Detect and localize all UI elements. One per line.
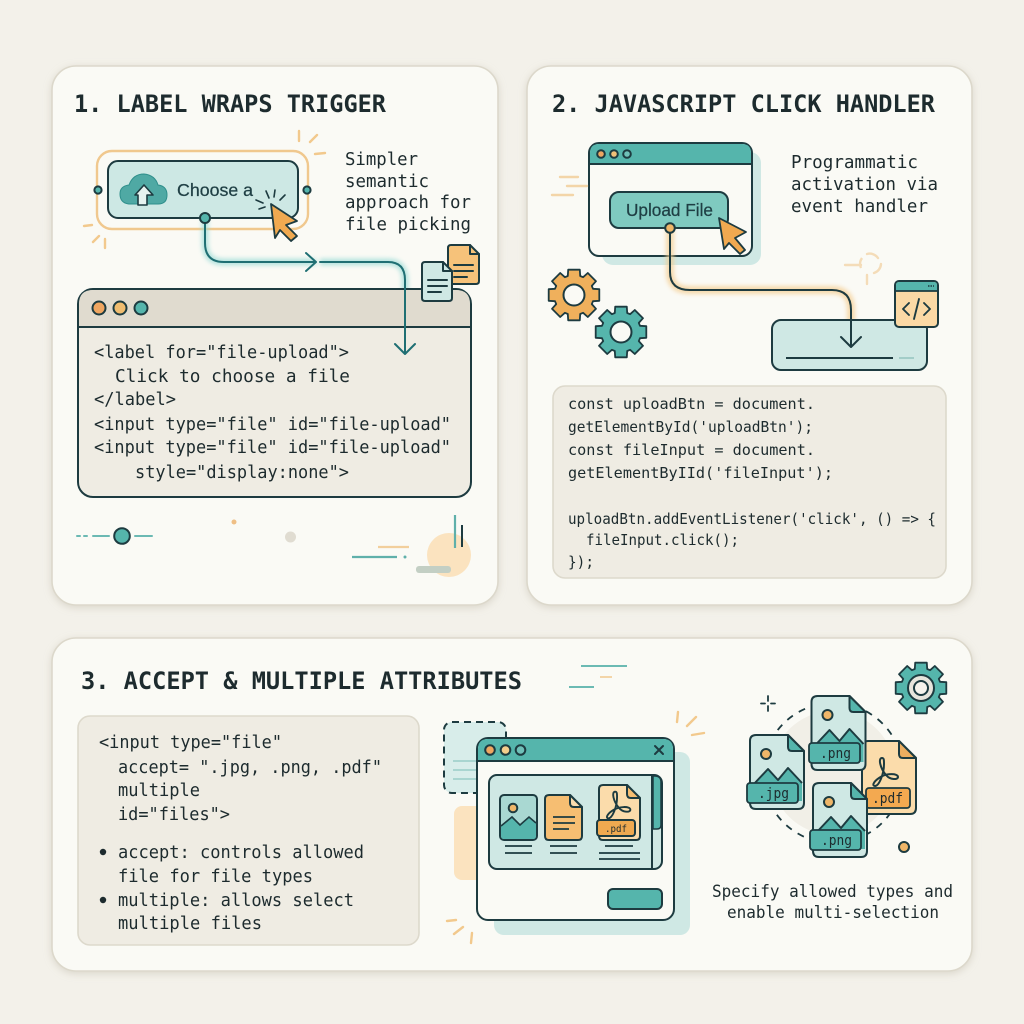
code and bullets box: accept= ".jpg, .png, .pdf"	[118, 757, 382, 778]
caption: enable multi-selection	[727, 903, 939, 923]
panel 2: javascript click handler	[527, 66, 972, 605]
connector glow	[205, 218, 414, 354]
decorative bottom elements	[77, 515, 471, 577]
speed lines	[552, 177, 587, 195]
description 2: event handler	[791, 196, 928, 217]
code and bullets box: multiple files	[118, 913, 262, 934]
code and bullets box: id="files">	[118, 804, 230, 825]
description 1: semantic	[345, 171, 429, 192]
description 2	[791, 152, 938, 217]
file types cluster	[747, 696, 916, 857]
jpg file: .jpg	[758, 786, 789, 802]
code text	[94, 342, 451, 483]
caption: Specify allowed types and	[712, 882, 953, 902]
connector line over window	[200, 213, 415, 354]
code block: });	[568, 553, 594, 571]
confirm button	[608, 889, 662, 909]
pdf file: .pdf	[872, 791, 903, 807]
hidden input box	[772, 320, 927, 370]
heading 3: 3. ACCEPT & MULTIPLE ATTRIBUTES	[81, 667, 522, 695]
description 2: Programmatic	[791, 152, 918, 173]
decorative heading lines	[569, 666, 627, 687]
heading 2: 2. JAVASCRIPT CLICK HANDLER	[552, 90, 936, 118]
code block: const fileInput = document.	[568, 441, 815, 459]
code window	[78, 289, 471, 497]
file name lines	[505, 846, 640, 859]
jpg file	[747, 735, 804, 809]
code block: uploadBtn.addEventListener('click', () => {	[568, 510, 936, 528]
label outline with button: Choose a	[177, 180, 253, 200]
code and bullets box: <input type="file"	[99, 732, 282, 753]
browser window with upload button	[589, 143, 761, 265]
code text: <input type="file" id="file-upload"	[94, 414, 451, 435]
code and bullets box: accept: controls allowed	[118, 842, 364, 863]
icon: gear	[896, 663, 946, 713]
label outline with button	[94, 151, 311, 229]
connector glow	[670, 228, 851, 345]
png file bottom: .png	[821, 833, 852, 849]
code text: <label for="file-upload">	[94, 342, 349, 363]
sparkle	[761, 696, 775, 711]
browser window with upload button: Upload File	[626, 200, 713, 220]
connector line	[665, 223, 861, 347]
thumbnail: image	[500, 795, 537, 840]
panel 3: accept and multiple attributes	[52, 638, 972, 971]
sparks around label	[84, 131, 325, 248]
description 1: file picking	[345, 214, 471, 235]
code block: const uploadBtn = document.	[568, 395, 815, 413]
icon: documents	[422, 245, 479, 301]
png file bottom	[810, 783, 867, 857]
code text: <input type="file" id="file-upload"	[94, 437, 451, 458]
code block: getElementByIId('fileInput');	[568, 464, 833, 482]
ghost shapes behind dialog	[444, 722, 690, 935]
thumbnail: pdf	[597, 785, 640, 840]
code text: style="display:none">	[135, 462, 349, 483]
code block: getElementById('uploadBtn');	[568, 418, 813, 436]
description 1: Simpler	[345, 149, 418, 170]
code block	[553, 386, 946, 578]
code and bullets box	[78, 716, 419, 945]
code text: Click to choose a file	[115, 366, 350, 387]
small dot	[899, 842, 909, 852]
code text: </label>	[94, 389, 176, 410]
description 2: activation via	[791, 174, 938, 195]
code and bullets box: multiple	[118, 780, 200, 801]
sparks around dialog	[447, 712, 704, 943]
icon: orange gear	[549, 270, 599, 320]
icon: cursor	[271, 204, 297, 241]
thumbnail: document	[545, 795, 582, 840]
faint target mark	[845, 254, 881, 284]
code and bullets box: file for file types	[118, 866, 313, 887]
code block: fileInput.click();	[586, 531, 739, 549]
png file top: .png	[820, 746, 851, 762]
caption	[712, 882, 953, 923]
panel 1: label wraps trigger	[52, 66, 498, 605]
pdf file	[862, 741, 916, 814]
heading 1: 1. LABEL WRAPS TRIGGER	[74, 90, 387, 118]
description 1: approach for	[345, 192, 471, 213]
icon: cursor	[719, 218, 746, 254]
thumbnail: pdf: .pdf	[605, 824, 627, 835]
png file top	[809, 696, 866, 770]
file dialog window	[477, 738, 674, 920]
description 1	[345, 149, 471, 235]
icon: code window	[895, 281, 938, 327]
icon: teal gear	[596, 307, 646, 357]
code and bullets box: multiple: allows select	[118, 890, 354, 911]
